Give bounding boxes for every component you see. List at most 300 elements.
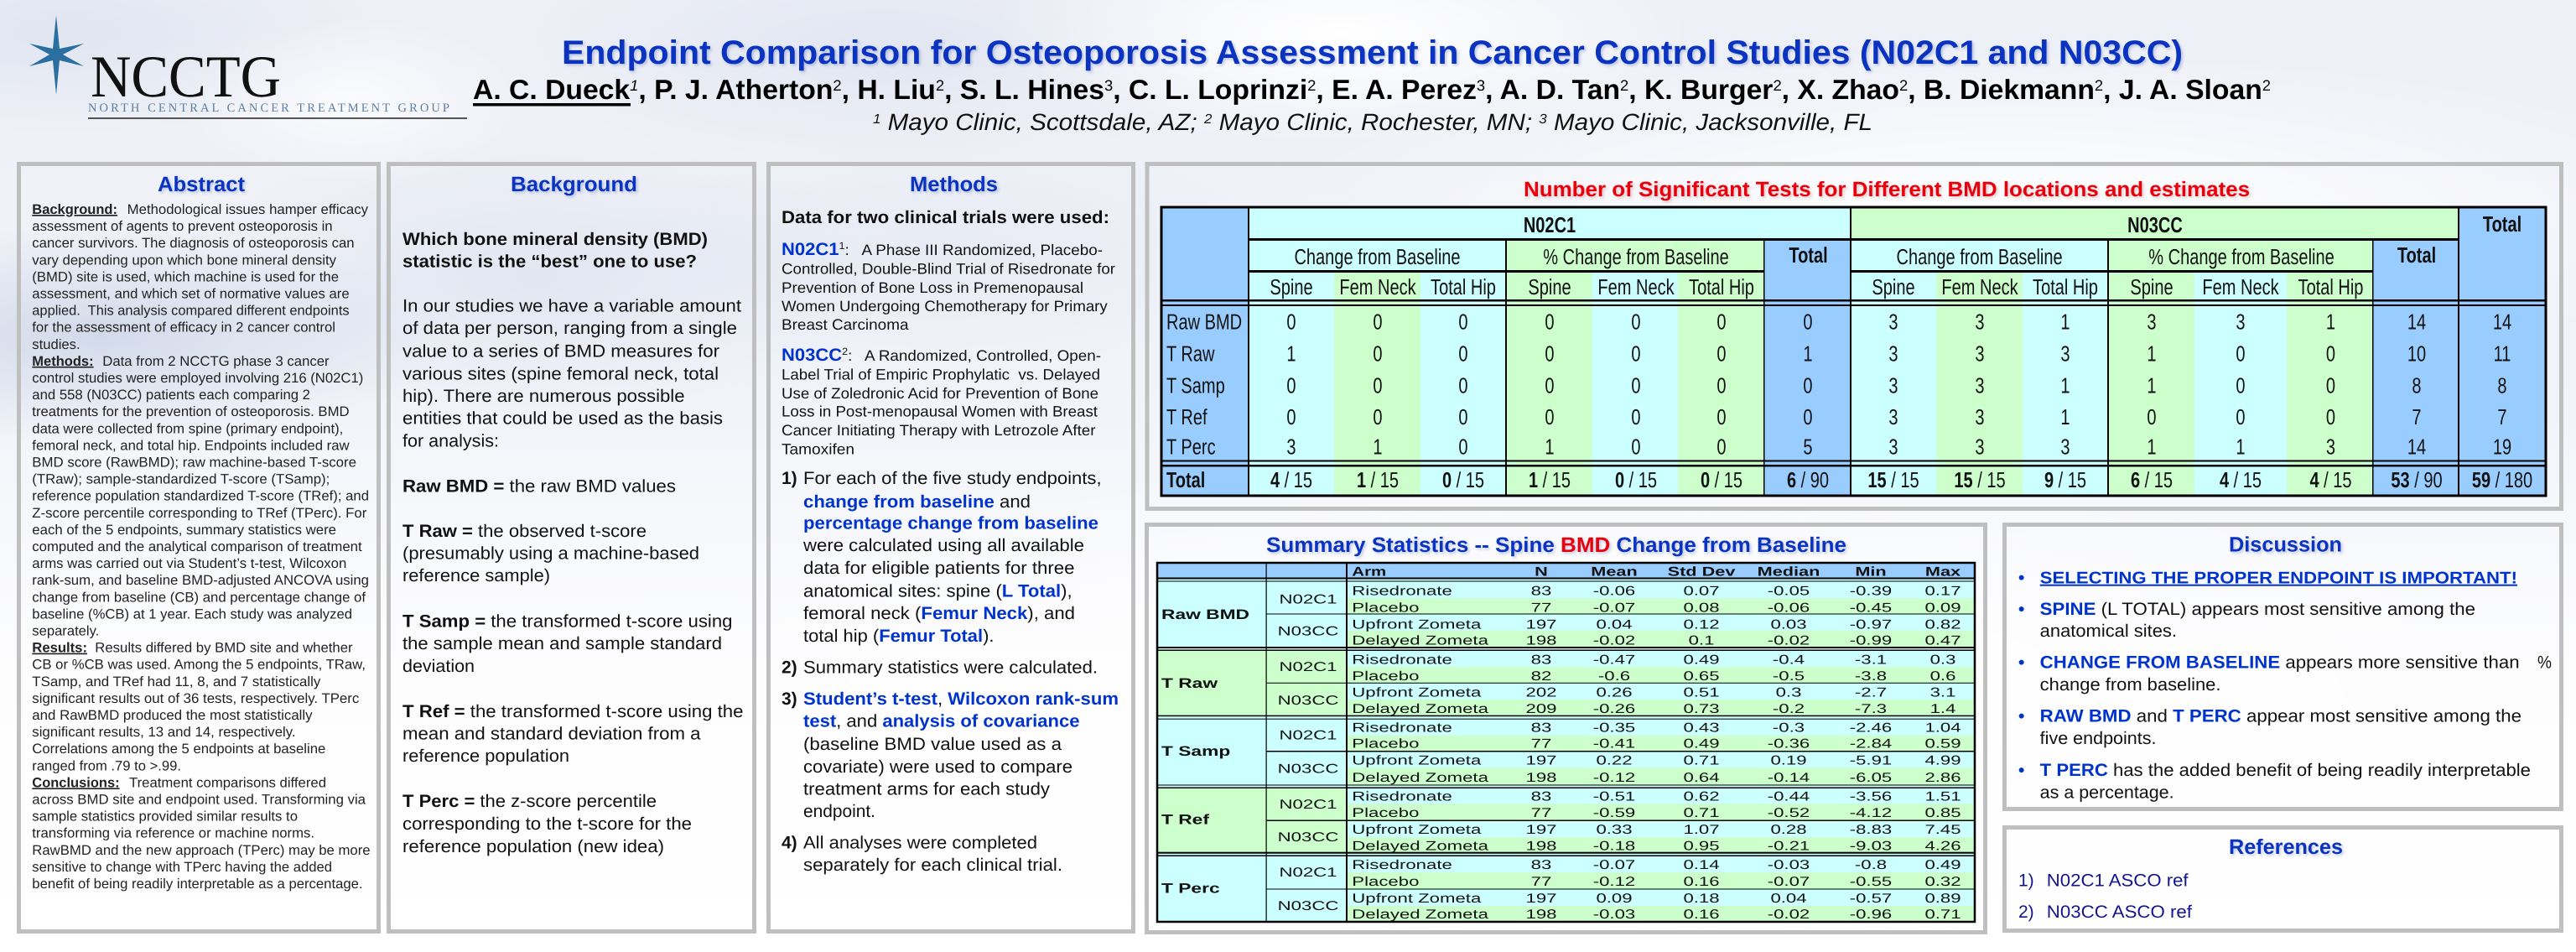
abstract: background paragraph: (BMD) site is used, which machine is used for the xyxy=(32,269,339,284)
column: N02C1 CFB fem neck: 1 / 15 xyxy=(1357,467,1399,492)
bullet 3: % xyxy=(2537,653,2552,673)
definition: T Perc: corresponding to the t-score for the xyxy=(402,814,692,834)
column: Max: 0.85 xyxy=(1924,806,1961,820)
authors: 2 xyxy=(1773,77,1782,94)
panel: discussion xyxy=(2004,525,2561,809)
table header: locations xyxy=(1270,274,2363,299)
trial: N03CC: Cancer Initiating Therapy with Letrozole After xyxy=(782,422,1096,439)
panel: background xyxy=(389,164,755,931)
arm labels: Risedronate xyxy=(1352,789,1452,804)
column: N03CC CFB fem neck: 3 xyxy=(1975,404,1985,429)
background: intro paragraph: In our studies we have a variable amount xyxy=(402,297,741,316)
column: Std Dev: 0.16 xyxy=(1683,908,1720,922)
abstract: results paragraph: CB or %CB was used. Among the 5 endpoints, TRaw, xyxy=(32,658,366,673)
column: N03CC CFB fem neck: 15 / 15 xyxy=(1954,467,2006,492)
column: N02C1 %CFB total hip: 0 / 15 xyxy=(1701,467,1742,492)
column: Std Dev: 0.49 xyxy=(1683,737,1720,752)
column: N02C1 total: 5 xyxy=(1803,434,1813,460)
column: Median: 0.04 xyxy=(1770,892,1807,906)
abstract: background paragraph: assessment of agents to prevent osteoporosis in xyxy=(32,219,333,234)
column: N02C1 CFB total hip: 0 xyxy=(1458,372,1468,398)
study labels: N02C1 xyxy=(1280,866,1337,880)
abstract: background paragraph: applied. This analysis compared different endpoints xyxy=(32,304,350,319)
panel: abstract xyxy=(18,164,379,931)
table header: locations: Spine xyxy=(1270,274,1313,299)
column: Std Dev: 0.14 xyxy=(1683,858,1720,872)
reference 1: 1) xyxy=(2018,871,2034,891)
column: Median: 0.19 xyxy=(1770,754,1807,768)
method step 3: endpoint. xyxy=(803,802,875,821)
methods heading: Methods xyxy=(910,173,998,196)
abstract: background paragraph: Methodological issues hamper efficacy xyxy=(127,202,369,217)
column: N03CC total: 7 xyxy=(2412,404,2422,429)
abstract: methods paragraph: data were collected from spine (primary endpoint), xyxy=(32,421,343,436)
study labels: N02C1 xyxy=(1280,592,1337,606)
column: Min: -0.8 xyxy=(1855,858,1887,872)
column: N: 198 xyxy=(1525,839,1557,853)
arm labels: Upfront Zometa xyxy=(1352,892,1482,906)
column: N03CC %CFB spine: 1 xyxy=(2147,434,2157,460)
bullet 5: • xyxy=(2018,761,2024,780)
background: intro paragraph xyxy=(402,297,741,451)
table header: study names: N03CC xyxy=(2127,212,2183,237)
column: N02C1 CFB fem neck: 0 xyxy=(1373,372,1383,398)
abstract: methods paragraph: Methods: xyxy=(32,354,94,369)
column: N03CC %CFB spine: 3 xyxy=(2147,310,2157,335)
abstract: background paragraph: for the assessment of efficacy in 2 cancer control xyxy=(32,320,335,336)
column: Median: -0.06 xyxy=(1768,601,1810,615)
column: N: 202 xyxy=(1525,686,1557,700)
summary header row: Min xyxy=(1855,565,1887,580)
column: Mean: -0.18 xyxy=(1593,839,1635,853)
column: Max: 2.86 xyxy=(1924,771,1961,785)
column: Min: -5.91 xyxy=(1850,754,1892,768)
affiliations: Mayo Clinic, Jacksonville, FL xyxy=(1547,109,1872,135)
column: N02C1 %CFB spine: 1 / 15 xyxy=(1529,467,1571,492)
column: N02C1 %CFB fem neck: 0 xyxy=(1631,372,1641,398)
column: Mean: -0.35 xyxy=(1593,721,1635,735)
bullet 3: CHANGE FROM BASELINE appears more sensitive than xyxy=(2040,653,2520,673)
column: Median: 0.28 xyxy=(1770,823,1807,837)
column: Std Dev: 0.16 xyxy=(1683,875,1720,889)
summary header row: Mean xyxy=(1591,565,1638,580)
panel: summary statistics xyxy=(1147,525,1986,933)
column: Max: 7.45 xyxy=(1924,823,1961,837)
column: Std Dev: 0.07 xyxy=(1683,584,1720,598)
abstract: results paragraph: Correlations among the 5 endpoints at baseline xyxy=(32,741,325,757)
arm labels: Placebo xyxy=(1352,806,1419,820)
abstract: background paragraph: assessment, and which set of normative values are xyxy=(32,287,350,302)
column: N03CC CFB spine: 3 xyxy=(1888,372,1898,398)
arm labels: Delayed Zometa xyxy=(1352,839,1488,853)
column: Std Dev: 0.71 xyxy=(1683,806,1720,820)
authors: 2 xyxy=(2095,77,2103,94)
study labels: N03CC xyxy=(1278,625,1338,639)
trial: N02C1: Prevention of Bone Loss in Premenopausal xyxy=(782,279,1083,296)
column: N: 83 xyxy=(1531,858,1551,872)
study labels: N03CC xyxy=(1278,694,1338,708)
authors: , S. L. Hines xyxy=(944,74,1104,105)
trial: N02C1 xyxy=(782,240,1115,333)
table header: locations: Total Hip xyxy=(1689,274,1754,299)
bullet 1: SELECTING THE PROPER ENDPOINT IS IMPORTANT! xyxy=(2040,570,2517,588)
summary header row: Max xyxy=(1925,565,1961,580)
column: N03CC total: 8 xyxy=(2412,372,2422,398)
table header: estimate types xyxy=(1294,242,2436,269)
abstract: results paragraph: ranged from .79 to >.99. xyxy=(32,758,181,773)
column: Median: -0.02 xyxy=(1768,633,1810,648)
trial: N03CC: Label Trial of Empiric Prophylatic vs. Delayed xyxy=(782,367,1100,383)
column: Mean: -0.07 xyxy=(1593,601,1635,615)
arm labels: Placebo xyxy=(1352,601,1419,615)
table row labels: Raw BMD xyxy=(1166,310,1242,335)
column: N03CC total: 14 xyxy=(2407,310,2426,335)
column: N03CC %CFB total hip: 1 xyxy=(2326,310,2335,335)
abstract: results paragraph: significant results, 13 and 14, respectively. xyxy=(32,725,296,740)
column: N03CC %CFB spine: 1 xyxy=(2147,372,2157,398)
column: Std Dev: 0.1 xyxy=(1689,633,1714,648)
table header: estimate types: % Change from Baseline xyxy=(2148,244,2334,269)
column: N: 209 xyxy=(1525,702,1557,716)
column: Mean: -0.06 xyxy=(1593,584,1635,598)
affiliations: Mayo Clinic, Scottsdale, AZ; xyxy=(880,109,1204,135)
method step 3: covariate) were used to compare xyxy=(803,757,1072,777)
column: N02C1 CFB total hip: 0 xyxy=(1458,341,1468,367)
method step 1: total hip (Femur Total ). xyxy=(803,627,995,646)
abstract: background paragraph: vary depending upon which bone mineral density xyxy=(32,252,337,268)
table header: locations: Total Hip xyxy=(2298,274,2363,299)
column: Max: 0.3 xyxy=(1930,653,1955,668)
trial: N02C1: Breast Carcinoma xyxy=(782,316,910,333)
arm labels: Upfront Zometa xyxy=(1352,823,1482,837)
table header: locations: Fem Neck xyxy=(1941,274,2018,299)
affiliations: Mayo Clinic, Rochester, MN; xyxy=(1212,109,1539,135)
definition: T Raw xyxy=(402,522,699,585)
column: Median: -0.52 xyxy=(1768,806,1810,820)
column: N: 83 xyxy=(1531,721,1551,735)
bullet 3: change from baseline. xyxy=(2040,675,2220,694)
authors: , K. Burger xyxy=(1628,74,1774,105)
table header: locations: Fem Neck xyxy=(1339,274,1416,299)
column: Median: 0.3 xyxy=(1776,686,1801,700)
column: Min: -9.03 xyxy=(1850,839,1892,853)
column: N02C1 total: 0 xyxy=(1803,372,1813,398)
arm labels: Delayed Zometa xyxy=(1352,908,1488,922)
column: Std Dev: 0.08 xyxy=(1683,601,1720,615)
column: Mean: 0.04 xyxy=(1596,617,1633,632)
column: Std Dev: 0.95 xyxy=(1683,839,1720,853)
column: N02C1 %CFB spine: 0 xyxy=(1545,372,1555,398)
logo: NCCTG xyxy=(29,15,467,119)
endpoint labels: T Perc xyxy=(1161,881,1220,896)
column: N03CC total: 14 xyxy=(2407,434,2426,460)
column: N03CC CFB spine: 3 xyxy=(1888,404,1898,429)
study labels: N03CC xyxy=(1278,762,1338,777)
column: Mean: -0.02 xyxy=(1593,633,1635,648)
column: Median: -0.21 xyxy=(1768,839,1810,853)
table header: locations: Fem Neck xyxy=(2202,274,2279,299)
study labels: N02C1 xyxy=(1280,798,1337,812)
affiliations: 3 xyxy=(1539,112,1547,127)
definition: T Samp: T Samp = the transformed t-score using xyxy=(402,612,733,632)
column: Std Dev: 0.51 xyxy=(1683,686,1720,700)
bullet 3 xyxy=(2018,653,2552,694)
column: Median: 0.03 xyxy=(1770,617,1807,632)
table header: estimate types: Change from Baseline xyxy=(1897,244,2063,269)
column: overall total: 8 xyxy=(2497,372,2507,398)
column: N02C1 CFB fem neck: 0 xyxy=(1373,404,1383,429)
trial: N02C1: N02C1 xyxy=(782,240,839,259)
column: Mean: 0.26 xyxy=(1596,686,1633,700)
column: N03CC %CFB fem neck: 4 / 15 xyxy=(2220,467,2262,492)
abstract: methods paragraph: baseline (%CB) at 1 year. Each study was analyzed xyxy=(32,606,352,622)
trial: N02C1: Controlled, Double-Blind Trial of Risedronate for xyxy=(782,261,1115,278)
arm labels: Delayed Zometa xyxy=(1352,633,1488,648)
method step 4: All analyses were completed xyxy=(803,834,1037,853)
arm labels: Placebo xyxy=(1352,669,1419,684)
abstract: results paragraph xyxy=(32,641,366,773)
column: Min: -2.7 xyxy=(1855,686,1887,700)
column: Mean: -0.41 xyxy=(1593,737,1635,752)
column: Min: -2.84 xyxy=(1850,737,1893,752)
background: question xyxy=(402,230,708,272)
column: Std Dev: 0.49 xyxy=(1683,653,1720,668)
abstract: conclusions paragraph: RawBMD and the new approach (TPerc) may be more xyxy=(32,843,371,858)
abstract: conclusions paragraph: sensitive to change with TPerc having the added xyxy=(32,860,332,875)
method step 3: 3) xyxy=(782,689,797,709)
column: N02C1 total: 6 / 90 xyxy=(1787,467,1829,492)
abstract: methods paragraph: Data from 2 NCCTG phase 3 cancer xyxy=(102,354,330,369)
logo tagline: NORTH CENTRAL CANCER TREATMENT GROUP xyxy=(88,101,449,115)
column: Std Dev: 0.73 xyxy=(1683,702,1720,716)
method step 3: test, and analysis of covariance xyxy=(803,712,1080,731)
summary title: Summary Statistics -- Spine BMD Change from Baseline xyxy=(1266,533,1846,557)
trial: N03CC: N03CC xyxy=(782,346,842,365)
arm labels: Upfront Zometa xyxy=(1352,617,1482,632)
column: Mean: -0.26 xyxy=(1593,702,1635,716)
bullet 2 xyxy=(2018,600,2475,641)
method step 2: 2) xyxy=(782,658,797,678)
column: N: 198 xyxy=(1525,908,1557,922)
column: Mean: -0.12 xyxy=(1593,771,1635,785)
column: Mean: -0.47 xyxy=(1593,653,1635,668)
table header: locations: Total Hip xyxy=(1431,274,1496,299)
background: intro paragraph: of data per person, ranging from a single xyxy=(402,319,737,338)
column: Mean: -0.03 xyxy=(1593,908,1635,922)
abstract: methods paragraph: separately. xyxy=(32,624,99,639)
abstract: methods paragraph: (TRaw); sample-standardized T-score (TSamp); xyxy=(32,472,330,487)
method step 4: separately for each clinical trial. xyxy=(803,856,1062,875)
authors: 2 xyxy=(1899,77,1908,94)
bullet 3: • xyxy=(2018,653,2024,673)
definition: T Ref: T Ref = the transformed t-score using the xyxy=(402,702,743,721)
column: Median: -0.03 xyxy=(1768,858,1810,872)
abstract: background paragraph: cancer survivors. The diagnosis of osteoporosis can xyxy=(32,236,355,251)
methods intro: Data for two clinical trials were used: xyxy=(782,208,1109,227)
column: N: 77 xyxy=(1531,737,1551,752)
arm labels: Risedronate xyxy=(1352,858,1452,872)
column: N: 77 xyxy=(1531,875,1551,889)
column: Mean: -0.59 xyxy=(1593,806,1635,820)
column: Min: -3.1 xyxy=(1855,653,1887,668)
endpoint labels: Raw BMD xyxy=(1161,607,1249,622)
column: N: 198 xyxy=(1525,771,1557,785)
definition: T Samp: deviation xyxy=(402,657,475,676)
abstract: methods paragraph xyxy=(32,354,369,639)
column: N03CC total: 10 xyxy=(2407,341,2426,367)
bullet 5: as a percentage. xyxy=(2040,783,2174,803)
column: Max: 1.51 xyxy=(1924,789,1961,804)
column: Min: -8.83 xyxy=(1850,823,1892,837)
column: N03CC %CFB fem neck: 0 xyxy=(2236,404,2246,429)
bullet 2: • xyxy=(2018,600,2024,619)
column: Min: -2.46 xyxy=(1850,721,1892,735)
abstract: results paragraph: Results differed by BMD site and whether xyxy=(95,641,353,656)
column: Mean: -0.51 xyxy=(1593,789,1635,804)
bullet 2: anatomical sites. xyxy=(2040,622,2177,641)
summary header row: Std Dev xyxy=(1668,565,1736,580)
table row labels: T Ref xyxy=(1166,404,1208,429)
column: N02C1 %CFB total hip: 0 xyxy=(1716,434,1727,460)
column: N03CC %CFB total hip: 0 xyxy=(2326,404,2335,429)
abstract: results paragraph: and RawBMD produced the most statistically xyxy=(32,708,313,723)
authors: 2 xyxy=(2262,77,2271,94)
column: N03CC CFB fem neck: 3 xyxy=(1975,434,1985,460)
column: N03CC %CFB fem neck: 0 xyxy=(2236,372,2246,398)
column: N03CC CFB fem neck: 3 xyxy=(1975,372,1985,398)
column: Min: -3.8 xyxy=(1855,669,1887,684)
column: N03CC %CFB spine: 0 xyxy=(2147,404,2157,429)
column: N02C1 %CFB spine: 0 xyxy=(1545,404,1555,429)
endpoint labels: T Raw xyxy=(1161,676,1218,691)
trial: N03CC: Loss in Post-menopausal Women with Breast xyxy=(782,403,1098,420)
column: Max: 0.49 xyxy=(1924,858,1961,872)
column: N03CC %CFB fem neck: 0 xyxy=(2236,341,2246,367)
column: Mean: 0.22 xyxy=(1596,754,1633,768)
summary header row: Median xyxy=(1758,565,1820,580)
column: N02C1 CFB spine: 0 xyxy=(1286,404,1296,429)
column: N03CC CFB spine: 3 xyxy=(1888,341,1898,367)
arm labels: Upfront Zometa xyxy=(1352,754,1482,768)
method step 1: data for eligible patients for three xyxy=(803,559,1075,578)
authors: , J. A. Sloan xyxy=(2103,74,2262,105)
column: N02C1 CFB spine: 0 xyxy=(1286,310,1296,335)
background heading: Background xyxy=(511,173,637,196)
abstract: methods paragraph: arms was carried out via Student’s t-test, Wilcoxon xyxy=(32,556,346,571)
table row labels: T Perc xyxy=(1166,434,1216,460)
column: Min: -4.12 xyxy=(1850,806,1892,820)
abstract: conclusions paragraph: transforming via reference or machine norms. xyxy=(32,826,314,841)
logo wordmark: NCCTG xyxy=(91,44,281,110)
column: Std Dev: 0.64 xyxy=(1683,771,1720,785)
authors: A. C. Dueck xyxy=(473,74,626,105)
column: Median: -0.2 xyxy=(1773,702,1805,716)
abstract heading: Abstract xyxy=(158,173,246,196)
bullet 5 xyxy=(2018,761,2531,803)
column: N03CC CFB fem neck: 3 xyxy=(1975,310,1985,335)
table row labels: T Samp xyxy=(1166,372,1225,398)
definition: T Ref: mean and standard deviation from a xyxy=(402,725,701,744)
column: Max: 4.26 xyxy=(1924,839,1961,853)
column: N03CC CFB total hip: 9 / 15 xyxy=(2044,467,2086,492)
column: N02C1 %CFB spine: 0 xyxy=(1545,310,1555,335)
abstract: background paragraph xyxy=(32,202,369,352)
arm labels: Placebo xyxy=(1352,875,1419,889)
trial: N03CC: : A Randomized, Controlled, Open- xyxy=(848,347,1101,364)
column: N02C1 CFB spine: 0 xyxy=(1286,372,1296,398)
authors: 3 xyxy=(1477,77,1485,94)
table: number of significant tests xyxy=(1161,207,2546,496)
column: N03CC %CFB total hip: 0 xyxy=(2326,341,2335,367)
method step 1: anatomical sites: spine ( L Total), xyxy=(803,582,1072,601)
column: Std Dev: 0.62 xyxy=(1683,789,1720,804)
definition: T Ref xyxy=(402,702,743,766)
column: Median: -0.07 xyxy=(1768,875,1810,889)
table header: locations: Spine xyxy=(1872,274,1915,299)
column: Median: -0.3 xyxy=(1773,721,1805,735)
icon: star xyxy=(29,15,84,95)
abstract: methods paragraph: rank-sum, and baseline BMD-adjusted ANCOVA using xyxy=(32,573,369,588)
column: Min: -7.3 xyxy=(1855,702,1887,716)
bullet 4: RAW BMD and T PERC appear most sensitive among the xyxy=(2040,707,2521,726)
arm labels: Placebo xyxy=(1352,737,1419,752)
column: Max: 0.6 xyxy=(1930,669,1955,684)
column: Min: -0.97 xyxy=(1850,617,1892,632)
abstract: methods paragraph: control studies were employed involving 216 (N02C1) xyxy=(32,371,363,386)
abstract: conclusions paragraph: benefit of being readily interpretable as a percentage. xyxy=(32,877,363,892)
column: Min: -6.05 xyxy=(1850,771,1892,785)
column: N02C1 %CFB total hip: 0 xyxy=(1716,310,1727,335)
trial: N03CC xyxy=(782,346,1101,458)
background: intro paragraph: various sites (spine femoral neck, total xyxy=(402,365,719,384)
background: intro paragraph: value to a series of BMD measures for xyxy=(402,342,719,362)
column: N: 197 xyxy=(1525,892,1557,906)
column: N02C1 total: 0 xyxy=(1803,404,1813,429)
discussion heading: Discussion xyxy=(2229,533,2342,557)
column: N02C1 %CFB fem neck: 0 xyxy=(1631,434,1641,460)
trial: N02C1: : A Phase III Randomized, Placebo- xyxy=(845,242,1103,258)
column: N02C1 %CFB total hip: 0 xyxy=(1716,341,1727,367)
method step 1: were calculated using all available xyxy=(802,536,1084,555)
column: Min: -0.99 xyxy=(1850,633,1892,648)
column: Median: -0.5 xyxy=(1773,669,1805,684)
column: overall total: 19 xyxy=(2493,434,2511,460)
column: Max: 0.47 xyxy=(1924,633,1961,648)
authors: 2 xyxy=(936,77,944,94)
method step 4 xyxy=(782,834,1062,875)
column: N03CC %CFB total hip: 0 xyxy=(2326,372,2335,398)
method step 1: For each of the five study endpoints, xyxy=(803,469,1102,488)
abstract: conclusions paragraph: sample statistics provided similar results to xyxy=(32,809,298,825)
arm labels: Risedronate xyxy=(1352,653,1452,668)
column: N02C1 CFB fem neck: 0 xyxy=(1373,341,1383,367)
abstract: results paragraph: Results: xyxy=(32,641,87,656)
study labels: N02C1 xyxy=(1280,660,1337,674)
background: question: Which bone mineral density (BMD) xyxy=(402,230,708,249)
table header: study names: Total xyxy=(2483,211,2521,237)
panel: significant tests table xyxy=(1147,164,2561,508)
column: N02C1 %CFB total hip: 0 xyxy=(1716,404,1727,429)
column: overall total: 14 xyxy=(2493,310,2511,335)
column: Mean: 0.09 xyxy=(1596,892,1633,906)
column: N02C1 CFB spine: 3 xyxy=(1286,434,1296,460)
column: Min: -3.56 xyxy=(1850,789,1892,804)
method step 3: (baseline BMD value used as a xyxy=(803,735,1062,754)
column: Mean: -0.6 xyxy=(1598,669,1630,684)
background: question: statistic is the “best” one to use? xyxy=(402,252,697,272)
table header: estimate types: Change from Baseline xyxy=(1294,244,1461,269)
method step 4: 4) xyxy=(782,834,797,853)
